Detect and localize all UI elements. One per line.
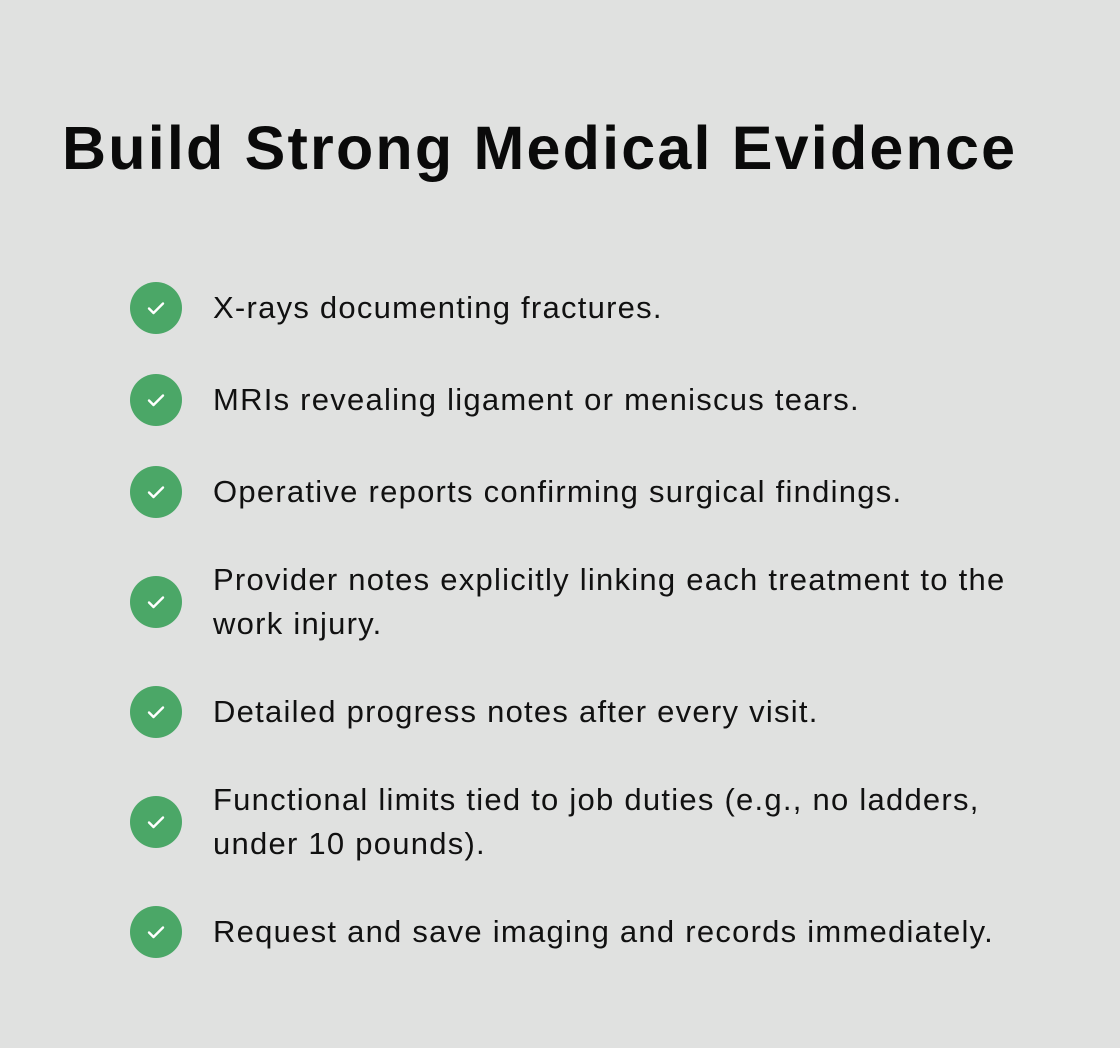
item: progress notes [130,686,819,738]
item: request records: Request and save imaging and records immediately. [213,914,994,949]
icon: check [130,796,182,848]
item: x-rays [130,282,663,334]
item: provider notes: Provider notes explicitly linking each treatment to the [213,562,1005,597]
icon: check [130,466,182,518]
item: operative reports: Operative reports confirming surgical findings. [213,474,902,509]
icon: check [130,576,182,628]
icon: check [130,282,182,334]
item: operative reports [130,466,902,518]
item: functional limits [130,782,980,861]
title: Build Strong Medical Evidence [62,114,1017,182]
item: MRIs [130,374,860,426]
icon: check [130,686,182,738]
item: functional limits: Functional limits tied to job duties (e.g., no ladders, [213,782,980,817]
item: request records [130,906,994,958]
icon: check [130,906,182,958]
icon: check [130,374,182,426]
item: progress notes: Detailed progress notes after every visit. [213,694,819,729]
item: MRIs: MRIs revealing ligament or meniscus tears. [213,382,860,417]
item: provider notes [130,562,1005,641]
item: provider notes: work injury. [213,606,382,641]
item: x-rays: X-rays documenting fractures. [213,290,663,325]
item: functional limits: under 10 pounds). [213,826,486,861]
